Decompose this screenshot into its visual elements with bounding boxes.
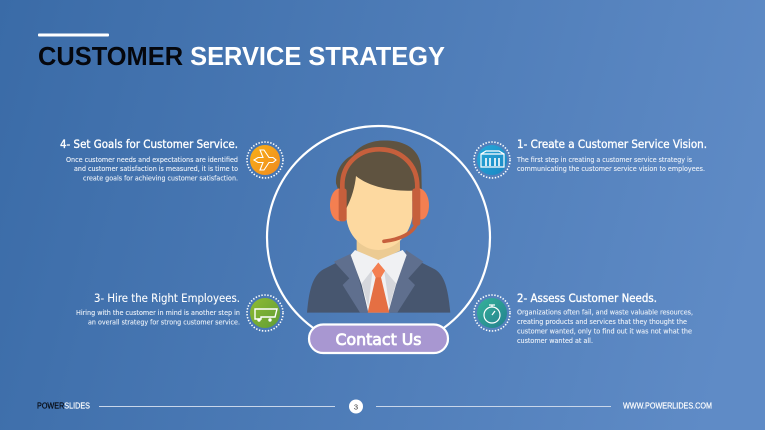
item 4: set goals: and customer satisfaction is measured, it is time to	[74, 164, 238, 173]
item 2: assess needs: Organizations often fail, and waste valuable resources,	[517, 308, 693, 316]
ear cups	[330, 188, 340, 221]
item 4: set goals: create goals for achieving customer satisfaction.	[83, 174, 238, 182]
microphone boom	[384, 223, 417, 241]
icon: airplane	[247, 142, 283, 178]
item 1: vision: 1- Create a Customer Service Vision.	[517, 137, 707, 151]
item 1: vision	[516, 137, 707, 173]
title accent bar	[38, 34, 109, 36]
item 2: assess needs: 2- Assess Customer Needs.	[517, 291, 657, 305]
title: CUSTOMER SERVICE STRATEGY	[38, 41, 445, 71]
page number: 3	[354, 402, 358, 412]
item 1: vision: communicating the customer service vision to employees.	[517, 164, 705, 173]
item 2: assess needs	[517, 291, 693, 345]
icon: warehouse	[474, 142, 510, 178]
face	[346, 176, 412, 250]
item 2: assess needs: customer wanted at all.	[517, 336, 593, 345]
item 3: hire employees: an overall strategy for strong customer service.	[88, 318, 240, 326]
contact us button: Contact Us	[336, 330, 422, 349]
page number	[349, 400, 363, 414]
item 3: hire employees: Hiring with the customer in mind is another step in	[76, 308, 240, 317]
hair back	[336, 140, 422, 210]
item 4: set goals: 4- Set Goals for Customer Service.	[60, 137, 238, 151]
footer website: WWW.POWERLIDES.COM	[623, 402, 712, 410]
item 3: hire employees: 3- Hire the Right Employees.	[94, 291, 240, 305]
neck	[357, 233, 400, 262]
item 4: set goals	[60, 137, 238, 182]
item 3: hire employees	[76, 291, 240, 326]
central circle outline	[267, 126, 490, 349]
icon: delivery truck	[247, 295, 283, 331]
shirt	[351, 250, 407, 313]
item 4: set goals: Once customer needs and expectations are identified	[66, 155, 238, 164]
suit	[307, 255, 450, 313]
item 2: assess needs: creating products and services that they thought the	[517, 317, 687, 326]
item 2: assess needs: customer wanted, only to find out it was not what the	[517, 326, 692, 336]
contact us button	[309, 324, 448, 353]
item 1: vision: The first step in creating a customer service strategy is	[516, 155, 692, 164]
icon: stopwatch	[474, 295, 510, 331]
illustration: customer service agent	[307, 140, 450, 313]
lapels	[334, 253, 368, 313]
headband	[342, 149, 417, 192]
tie	[368, 263, 389, 313]
footer brand: POWERSLIDES	[37, 402, 90, 410]
